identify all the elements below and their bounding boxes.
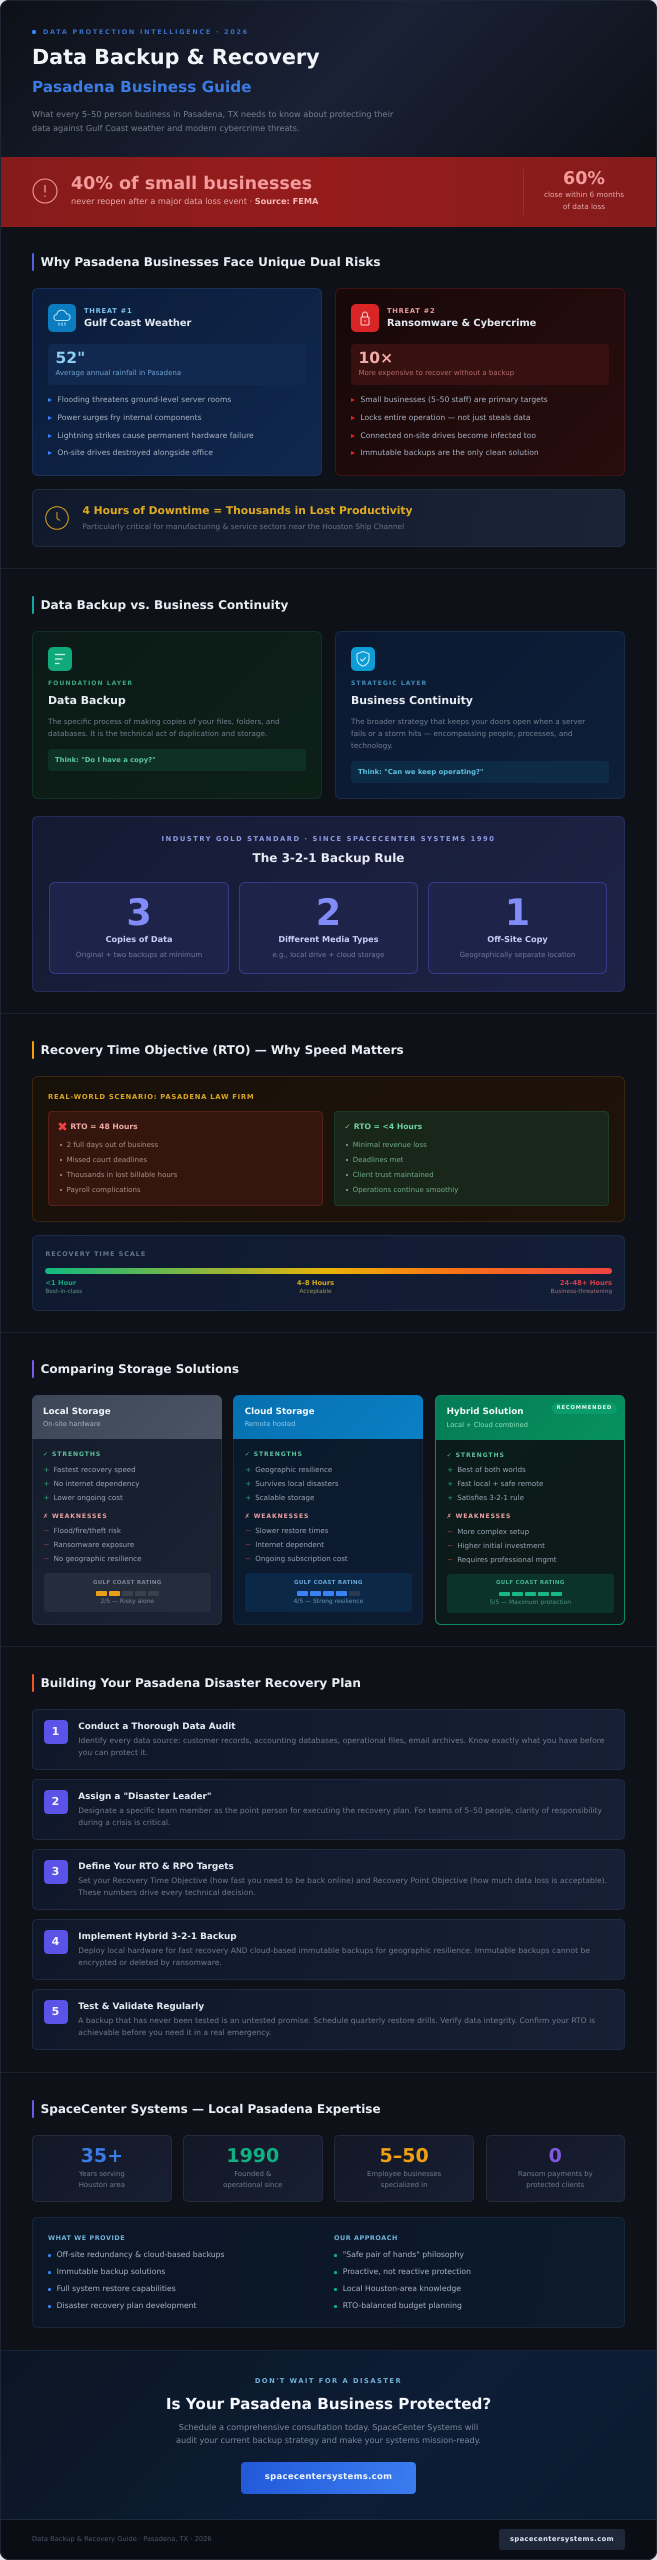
threat title: Ransomware & Cybercrime xyxy=(387,318,536,329)
low note: Best-in-class xyxy=(45,1289,82,1295)
panel: local storage: ✓ xyxy=(43,1451,48,1458)
stat label: Ransom payments by xyxy=(518,2170,593,2178)
strengths xyxy=(43,1451,140,1502)
panel: cloud storage: ✗ xyxy=(245,1513,250,1520)
rating label: GULF COAST RATING xyxy=(496,1580,565,1586)
cta text: Schedule a comprehensive consultation today. SpaceCenter Systems will xyxy=(179,2422,478,2432)
highlight border xyxy=(435,1395,625,1625)
rating pips xyxy=(96,1591,159,1596)
side label: of data loss xyxy=(563,202,605,211)
panel: services and approach: Immutable backup solutions xyxy=(57,2267,165,2276)
mid note: Acceptable xyxy=(299,1289,332,1295)
subtitle: Pasadena Business Guide xyxy=(32,78,251,96)
heading: backup vs continuity: Data Backup vs. Business Continuity xyxy=(41,598,288,612)
panel: hybrid solution xyxy=(435,1395,625,1625)
panel: threat 2 ransomware: Connected on-site drives become infected too xyxy=(360,431,536,440)
stat label: specialized in xyxy=(381,2181,427,2189)
box note: Geographically separate location xyxy=(460,951,575,959)
step title: Assign a "Disaster Leader" xyxy=(78,1792,212,1802)
heading: RTO: Recovery Time Objective (RTO) — Why Speed Matters xyxy=(41,1043,404,1057)
risk list xyxy=(48,395,254,457)
card title: Business Continuity xyxy=(351,694,473,707)
stat label: protected clients xyxy=(526,2181,584,2189)
stat label: Founded & xyxy=(234,2170,271,2178)
panel: threat 2 ransomware xyxy=(335,288,625,476)
think box xyxy=(351,761,609,783)
step text xyxy=(78,1806,602,1827)
step number xyxy=(44,1790,68,1814)
header xyxy=(0,0,657,157)
side label xyxy=(544,190,624,211)
card description: fails or a storm hits — encompassing people, processes, and xyxy=(351,729,573,738)
bad heading: RTO = 48 Hours xyxy=(70,1122,138,1131)
step number xyxy=(44,1720,68,1744)
gulf coast rating xyxy=(447,1574,614,1613)
callout heading: 4 Hours of Downtime = Thousands in Lost Productivity xyxy=(82,504,412,517)
bad heading: ✖ xyxy=(57,1119,68,1134)
panel: local storage: ✗ xyxy=(43,1513,48,1520)
main statistic: 40% of small businesses xyxy=(71,174,312,194)
panel: hybrid solution: − xyxy=(447,1541,453,1550)
side label: close within 6 months xyxy=(544,190,624,199)
cost label: More expensive to recover without a backup xyxy=(358,369,514,377)
panel: threat 1 weather: On-site drives destroyed alongside office xyxy=(57,448,213,457)
panel: hybrid solution: Higher initial investment xyxy=(457,1541,545,1550)
step number xyxy=(44,1860,68,1884)
60 percent: 60% xyxy=(563,169,605,189)
stat label xyxy=(223,2170,282,2189)
step text: during a crisis is critical. xyxy=(78,1818,170,1827)
panel: hybrid solution: WEAKNESSES xyxy=(456,1513,511,1520)
icon: lines xyxy=(48,647,72,671)
step text: Identify every data source: customer records, accounting databases, operational files, email archives. Know exactly what you have before xyxy=(78,1736,604,1745)
box note: Original + two backups at minimum xyxy=(76,951,202,959)
intro text xyxy=(32,109,394,133)
weaknesses xyxy=(447,1513,557,1564)
panel: local storage: − xyxy=(44,1526,49,1535)
step number xyxy=(44,2000,68,2024)
threat title: Gulf Coast Weather xyxy=(84,318,191,329)
think text: Think: "Can we keep operating?" xyxy=(358,768,483,776)
panel: services and approach: RTO-balanced budget planning xyxy=(343,2301,462,2310)
panel: hybrid solution: Satisfies 3-2-1 rule xyxy=(457,1493,524,1502)
step text: achievable before you need it in a real emergency. xyxy=(78,2028,271,2037)
panel: cloud storage: − xyxy=(245,1554,251,1563)
panel: threat 1 weather: Lightning strikes cause permanent hardware failure xyxy=(57,431,254,440)
cta button: spacecentersystems.com xyxy=(265,2472,392,2482)
panel: threat 1 weather: Flooding threatens ground-level server rooms xyxy=(57,395,231,404)
stat: ransom xyxy=(486,2135,625,2202)
threat label: THREAT #1 xyxy=(84,307,132,315)
rainfall number: 52" xyxy=(56,349,85,367)
panel: hybrid solution: ✗ xyxy=(447,1513,452,1520)
footer xyxy=(0,2520,657,2560)
alert banner xyxy=(0,157,657,227)
rating pips xyxy=(297,1591,360,1596)
step title: Conduct a Thorough Data Audit xyxy=(78,1722,236,1732)
footer badge: spacecentersystems.com xyxy=(510,2535,614,2543)
weaknesses xyxy=(43,1513,142,1563)
panel: hybrid solution: + xyxy=(447,1465,453,1474)
panel: hybrid solution: − xyxy=(447,1555,453,1564)
stat label xyxy=(518,2170,593,2189)
footer badge xyxy=(499,2529,625,2550)
heading: local expertise: SpaceCenter Systems — Local Pasadena Expertise xyxy=(41,2102,381,2116)
step number: 2 xyxy=(52,1795,59,1808)
cta button xyxy=(241,2462,416,2494)
scenario: 48 hour RTO xyxy=(48,1111,323,1206)
panel: law firm scenario xyxy=(32,1076,625,1222)
panel: cloud storage: ✓ xyxy=(245,1451,250,1458)
weaknesses xyxy=(245,1513,348,1563)
bad list xyxy=(60,1141,177,1194)
side statistic xyxy=(523,169,643,215)
stat number: 1990 xyxy=(226,2145,279,2167)
mid label: 4–8 Hours xyxy=(297,1279,334,1287)
panel: cloud storage: − xyxy=(245,1540,251,1549)
scenario: 48 hour RTO: Thousands in lost billable hours xyxy=(67,1171,177,1179)
panel: local storage: Fastest recovery speed xyxy=(54,1465,136,1474)
panel: hybrid solution: + xyxy=(447,1493,453,1502)
rule box: 3 copies xyxy=(49,882,229,974)
panel: hybrid solution: More complex setup xyxy=(457,1527,529,1536)
scenario: 4 hour RTO: Operations continue smoothly xyxy=(353,1186,458,1194)
threat label: THREAT #2 xyxy=(387,307,435,315)
rainfall label: Average annual rainfall in Pasadena xyxy=(56,369,181,377)
cost number: 10× xyxy=(358,349,393,367)
stat: founded xyxy=(183,2135,323,2202)
rule box: 2 media xyxy=(239,882,418,974)
panel: hybrid solution: ✓ xyxy=(447,1452,452,1459)
card description: The broader strategy that keeps your doors open when a server xyxy=(351,717,585,726)
rating pips xyxy=(499,1592,562,1596)
card subtitle: Remote hosted xyxy=(245,1420,295,1428)
card description xyxy=(48,717,280,738)
rating text: 2/5 — Risky alone xyxy=(100,1598,154,1605)
rating label: GULF COAST RATING xyxy=(294,1580,363,1586)
card description xyxy=(351,717,586,750)
panel: cloud storage: − xyxy=(245,1526,251,1535)
panel: local storage: Flood/fire/theft risk xyxy=(54,1526,121,1535)
box label: Copies of Data xyxy=(106,934,172,944)
scale title: RECOVERY TIME SCALE xyxy=(45,1250,146,1258)
digit: 3 xyxy=(126,891,152,934)
step 2 xyxy=(32,1779,625,1840)
chart: recovery time scale xyxy=(32,1235,625,1311)
panel: services and approach: OUR APPROACH xyxy=(334,2234,398,2242)
panel: local storage xyxy=(32,1395,222,1625)
stat box xyxy=(48,344,306,385)
panel: local storage: WEAKNESSES xyxy=(52,1513,108,1520)
scenario: 4 hour RTO: Client trust maintained xyxy=(353,1171,434,1179)
card header xyxy=(435,1395,625,1440)
step number: 1 xyxy=(52,1725,59,1738)
step text xyxy=(78,1736,604,1757)
step title: Implement Hybrid 3-2-1 Backup xyxy=(78,1932,237,1942)
cta eyebrow: DON'T WAIT FOR A DISASTER xyxy=(255,2377,402,2385)
think box xyxy=(48,749,306,771)
card header xyxy=(233,1395,423,1439)
panel: cloud storage: WEAKNESSES xyxy=(254,1513,309,1520)
scenario title: REAL-WORLD SCENARIO: PASADENA LAW FIRM xyxy=(48,1093,254,1101)
cta text xyxy=(0,2420,657,2446)
panel: local storage: No geographic resilience xyxy=(54,1554,141,1563)
gulf coast rating xyxy=(245,1573,412,1612)
box label: Off-Site Copy xyxy=(487,934,548,944)
card description: The specific process of making copies of your files, folders, and xyxy=(48,717,280,726)
heading: storage: Comparing Storage Solutions xyxy=(41,1362,239,1376)
panel: cloud storage: Scalable storage xyxy=(255,1493,314,1502)
panel: cloud storage xyxy=(233,1395,423,1625)
callout: downtime xyxy=(32,489,625,547)
card title: Local Storage xyxy=(43,1407,111,1417)
cta text: audit your current backup strategy and make your systems mission-ready. xyxy=(176,2434,481,2444)
card title: Data Backup xyxy=(48,694,126,707)
card subtitle: On-site hardware xyxy=(43,1420,101,1428)
panel: services and approach: WHAT WE PROVIDE xyxy=(48,2234,125,2242)
high label: 24–48+ Hours xyxy=(560,1279,612,1287)
heading: dual risks: Why Pasadena Businesses Face Unique Dual Risks xyxy=(41,255,380,269)
rating text: 4/5 — Strong resilience xyxy=(293,1598,363,1605)
strengths xyxy=(447,1452,543,1502)
intro text: What every 5–50 person business in Pasadena, TX needs to know about protecting their xyxy=(32,109,393,119)
callout text: Particularly critical for manufacturing & service sectors near the Houston Ship Channel xyxy=(82,522,404,531)
step 4 xyxy=(32,1919,625,1980)
stat number: 5–50 xyxy=(380,2145,429,2167)
panel: hybrid solution: STRENGTHS xyxy=(456,1452,505,1459)
panel: local storage: − xyxy=(44,1540,49,1549)
step text: Deploy local hardware for fast recovery AND cloud-based immutable backups for geographic resilience. Immutable backups cannot be xyxy=(78,1946,590,1955)
step text xyxy=(78,1946,590,1967)
step text: you can protect it. xyxy=(78,1748,148,1757)
step title: Define Your RTO & RPO Targets xyxy=(78,1862,234,1872)
box note: e.g., local drive + cloud storage xyxy=(272,951,384,959)
good list xyxy=(346,1141,458,1194)
step text: A backup that has never been tested is an untested promise. Schedule quarterly restore drills. Verify data integrity. Confirm your RTO is xyxy=(78,2016,595,2025)
panel: business continuity xyxy=(335,631,625,799)
panel: local storage: Ransomware exposure xyxy=(54,1540,134,1549)
step text xyxy=(78,1876,607,1897)
panel: cloud storage: + xyxy=(245,1493,251,1502)
scenario: 4 hour RTO: Deadlines met xyxy=(353,1156,404,1164)
card subtitle: Local + Cloud combined xyxy=(447,1421,528,1429)
scenario: 4 hour RTO: Minimal revenue loss xyxy=(353,1141,427,1149)
high note: Business-threatening xyxy=(551,1289,612,1295)
stat label: Employee businesses xyxy=(367,2170,441,2178)
step number: 5 xyxy=(52,2005,59,2018)
rule title: The 3-2-1 Backup Rule xyxy=(253,851,404,865)
stat label: Houston area xyxy=(79,2181,125,2189)
step text: encrypted or deleted by ransomware. xyxy=(78,1958,222,1967)
scenario: 48 hour RTO: Payroll complications xyxy=(67,1186,141,1194)
title: Data Backup & Recovery xyxy=(32,45,320,69)
step 5 xyxy=(32,1989,625,2050)
panel: services and approach xyxy=(32,2217,625,2328)
stat: employees xyxy=(334,2135,474,2202)
panel: threat 1 weather: Power surges fry internal components xyxy=(57,413,202,422)
step text: Designate a specific team member as the point person for executing the recovery plan. For teams of 5–50 people, clarity of responsibility xyxy=(78,1806,602,1815)
panel: 3-2-1 rule xyxy=(32,816,625,992)
step text: These numbers drive every technical decision. xyxy=(78,1888,256,1897)
scenario: 4 hour RTO xyxy=(334,1111,609,1206)
panel: services and approach: "Safe pair of hands" philosophy xyxy=(343,2250,464,2259)
risk list xyxy=(351,395,548,457)
card header xyxy=(32,1395,222,1439)
badge: recommended xyxy=(552,1403,617,1414)
panel: local storage: Lower ongoing cost xyxy=(54,1493,123,1502)
stat label xyxy=(367,2170,441,2189)
stat number: 0 xyxy=(549,2145,562,2167)
strengths xyxy=(245,1451,339,1502)
panel: hybrid solution: Best of both worlds xyxy=(457,1465,526,1474)
step 3 xyxy=(32,1849,625,1910)
statistic source: never reopen after a major data loss event · Source: FEMA xyxy=(71,196,318,206)
step 1 xyxy=(32,1709,625,1770)
rule box: 1 offsite xyxy=(428,882,607,974)
badge: recommended: RECOMMENDED xyxy=(557,1405,612,1411)
panel: cloud storage: Ongoing subscription cost xyxy=(255,1554,348,1563)
panel: local storage: + xyxy=(44,1479,49,1488)
panel: local storage: STRENGTHS xyxy=(52,1451,101,1458)
panel: services and approach: Full system restore capabilities xyxy=(57,2284,176,2293)
gradient bar xyxy=(45,1268,612,1274)
bad heading xyxy=(57,1119,138,1134)
panel: services and approach: Off-site redundancy & cloud-based backups xyxy=(57,2250,225,2259)
rule eyebrow: INDUSTRY GOLD STANDARD · SINCE SPACECENTER SYSTEMS 1990 xyxy=(162,835,495,843)
panel: local storage: − xyxy=(44,1554,49,1563)
panel: local storage: + xyxy=(44,1493,49,1502)
step number: 3 xyxy=(52,1865,59,1878)
scenario: 48 hour RTO: Missed court deadlines xyxy=(67,1156,147,1164)
panel: hybrid solution: Fast local + safe remote xyxy=(457,1479,543,1488)
icon: rain cloud xyxy=(48,304,76,332)
rating text: 5/5 — Maximum protection xyxy=(489,1599,571,1606)
card description: databases. It is the technical act of duplication and storage. xyxy=(48,729,267,738)
panel: cloud storage: + xyxy=(245,1465,251,1474)
step number xyxy=(44,1930,68,1954)
think text: Think: "Do I have a copy?" xyxy=(55,756,156,764)
panel: cloud storage: + xyxy=(245,1479,251,1488)
card description: technology. xyxy=(351,741,393,750)
panel: threat 1 weather xyxy=(32,288,322,476)
cta title: Is Your Pasadena Business Protected? xyxy=(166,2395,491,2413)
panel: cloud storage: Internet dependent xyxy=(255,1540,324,1549)
card title: Hybrid Solution xyxy=(447,1407,523,1417)
footer text: Data Backup & Recovery Guide · Pasadena, TX · 2026 xyxy=(32,2535,212,2543)
step title: Test & Validate Regularly xyxy=(78,2002,204,2012)
panel: hybrid solution: − xyxy=(447,1527,453,1536)
good heading: ✓ RTO = <4 Hours xyxy=(344,1122,422,1131)
eyebrow: DATA PROTECTION INTELLIGENCE · 2026 xyxy=(43,28,249,36)
layer label: FOUNDATION LAYER xyxy=(48,680,133,687)
low label: <1 Hour xyxy=(45,1279,76,1287)
panel: services and approach: Proactive, not reactive protection xyxy=(343,2267,471,2276)
stat number: 35+ xyxy=(81,2145,123,2167)
stat label: operational since xyxy=(223,2181,282,2189)
panel: threat 2 ransomware: Immutable backups are the only clean solution xyxy=(360,448,539,457)
step number: 4 xyxy=(52,1935,59,1948)
digit: 2 xyxy=(316,891,341,934)
gulf coast rating xyxy=(44,1573,211,1612)
panel: threat 2 ransomware: Small businesses (5–50 staff) are primary targets xyxy=(360,395,548,404)
panel: cloud storage: Survives local disasters xyxy=(255,1479,339,1488)
icon: clock xyxy=(45,506,69,530)
icon: lock xyxy=(351,304,379,332)
panel: local storage: + xyxy=(44,1465,49,1474)
panel: cloud storage: STRENGTHS xyxy=(254,1451,303,1458)
layer label: STRATEGIC LAYER xyxy=(351,680,427,687)
stat label: Years serving xyxy=(79,2170,125,2178)
panel: services and approach: Disaster recovery plan development xyxy=(57,2301,197,2310)
panel: services and approach: Local Houston-area knowledge xyxy=(343,2284,461,2293)
box label: Different Media Types xyxy=(278,934,379,944)
stat label xyxy=(79,2170,125,2189)
card title: Cloud Storage xyxy=(245,1407,315,1417)
icon: shield check xyxy=(351,647,375,671)
intro text: data against Gulf Coast weather and modern cybercrime threats. xyxy=(32,123,300,133)
panel: data backup xyxy=(32,631,322,799)
what we provide xyxy=(48,2234,225,2310)
panel: cloud storage: Geographic resilience xyxy=(255,1465,332,1474)
step text xyxy=(78,2016,595,2037)
panel: hybrid solution: + xyxy=(447,1479,453,1488)
call to action xyxy=(0,2350,657,2520)
step text: Set your Recovery Time Objective (how fast you need to be back online) and Recovery Point Objective (how much data loss is acceptable). xyxy=(78,1876,607,1885)
stat box xyxy=(351,344,609,385)
panel: threat 2 ransomware: Locks entire operation — not just steals data xyxy=(360,413,531,422)
icon: warning circle xyxy=(32,178,58,204)
panel: cloud storage: Slower restore times xyxy=(255,1526,328,1535)
our approach xyxy=(334,2234,471,2310)
stat: years xyxy=(32,2135,172,2202)
panel: hybrid solution: Requires professional mgmt xyxy=(457,1555,557,1564)
rating label: GULF COAST RATING xyxy=(93,1580,162,1586)
heading: recovery plan: Building Your Pasadena Disaster Recovery Plan xyxy=(41,1676,361,1690)
scenario: 48 hour RTO: 2 full days out of business xyxy=(67,1141,158,1149)
digit: 1 xyxy=(505,891,530,934)
panel: local storage: No internet dependency xyxy=(54,1479,140,1488)
